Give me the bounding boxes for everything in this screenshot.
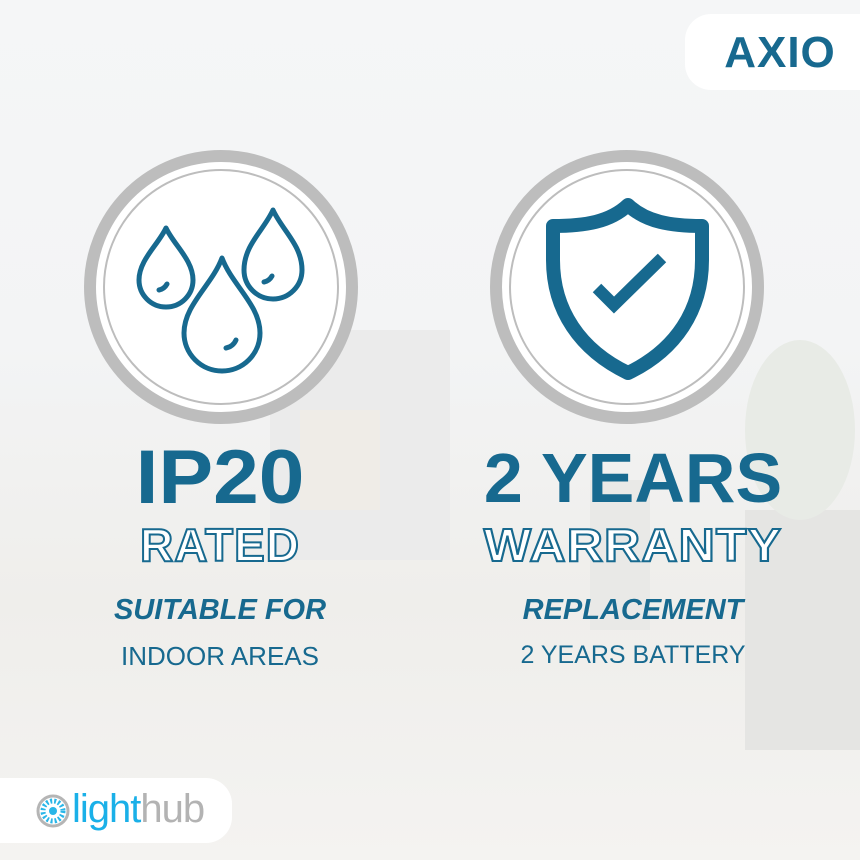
text: 2 years battery: 2 YEARS BATTERY	[520, 641, 746, 669]
icon: water drops circle	[84, 150, 358, 424]
logo: lighthub: lighthub	[72, 787, 204, 831]
text: WARRANTY outline: WARRANTY	[484, 519, 782, 571]
heading: IP20: IP20	[136, 435, 304, 520]
badge: AXIO: AXIO	[724, 28, 836, 77]
text: indoor areas: INDOOR AREAS	[121, 641, 319, 671]
logo: lighthub	[0, 778, 232, 843]
text: suitable for: SUITABLE FOR	[114, 594, 326, 626]
icon: shield circle	[490, 150, 764, 424]
badge: AXIO	[685, 14, 860, 90]
text: RATED outline: RATED	[140, 519, 300, 571]
heading: 2 YEARS: 2 YEARS	[484, 439, 782, 517]
text: replacement: REPLACEMENT	[523, 594, 743, 626]
